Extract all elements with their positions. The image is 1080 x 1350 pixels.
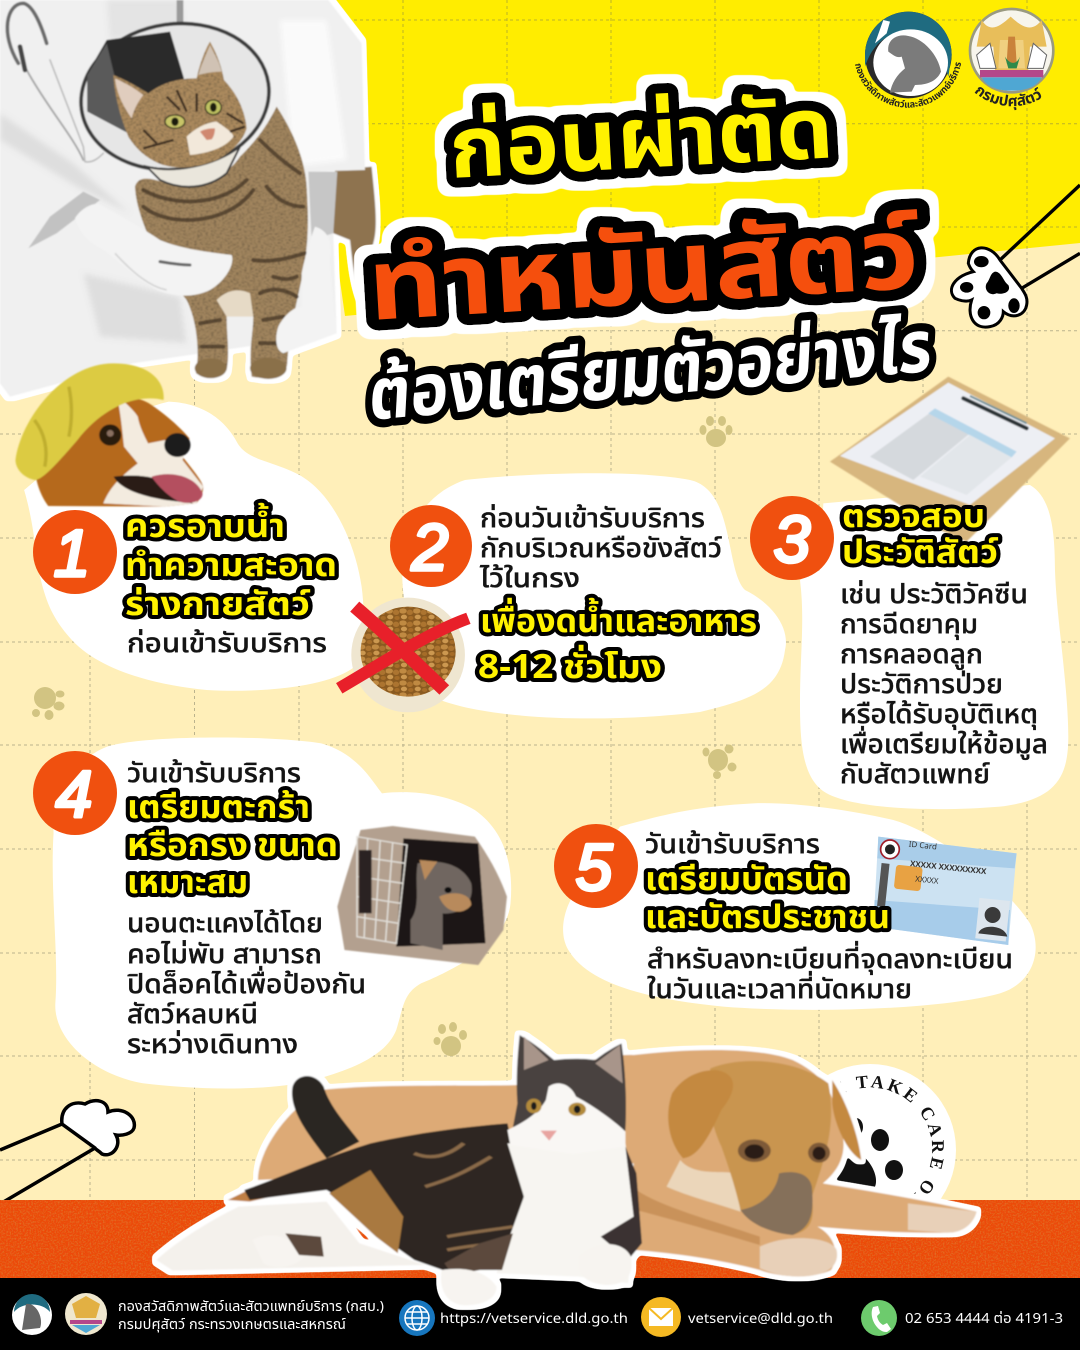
body text: หรือได้รับอุบัติเหตุ [840, 695, 1038, 735]
cat eyes and nose [165, 115, 185, 128]
illustration: Thai national ID card: ID Card [908, 839, 938, 854]
heading [125, 502, 337, 630]
body text: กับสัตวแพทย์ [840, 755, 990, 795]
cat rear leg [333, 167, 376, 300]
dog head [708, 1061, 831, 1235]
cat eyes and nose [526, 1099, 542, 1113]
stethoscope [7, 3, 103, 162]
intro text [479, 499, 722, 599]
decorative outlined cat paw: left [0, 1101, 134, 1204]
cat tail [292, 1076, 359, 1158]
heading [842, 492, 999, 578]
body text: ก่อนเข้ารับบริการ [127, 624, 327, 664]
blob background [800, 485, 1068, 809]
cat paws [195, 358, 287, 379]
card 5: appointment card and ID card [554, 803, 1036, 1010]
heading [478, 597, 757, 693]
footer: organisation logos and name: กรมปศุสัตว์ กระทรวงเกษตรและสหกรณ์ [118, 1315, 346, 1336]
heading: หรือกรง ขนาด [127, 821, 338, 871]
heading: ควรอาบน้ำ [125, 502, 285, 552]
illustration: Thai national ID card [873, 837, 1017, 945]
heading: เพื่องดน้ำและอาหาร [480, 597, 757, 647]
illustration: Thai national ID card: XXXXX XXXXXXXXX [909, 858, 988, 878]
illustration: Thai national ID card: XXXXX [915, 874, 939, 888]
white vet coat [0, 0, 365, 397]
footer: organisation logos and name: กองสวัสดิภาพสัตว์และสัตวแพทย์บริการ (กสบ.) [118, 1297, 384, 1318]
photo: dog lying behind calico cat [156, 1035, 976, 1305]
footer: website: https://vetservice.dld.go.th [440, 1309, 628, 1330]
body text: เพื่อเตรียมให้ข้อมูล [840, 725, 1048, 765]
card 2: withhold food and water [339, 473, 786, 718]
card 1: bathe the animal [15, 363, 364, 691]
number badge 5 [554, 824, 638, 908]
dog body [258, 1050, 976, 1276]
heading: ตรวจสอบ [842, 492, 985, 542]
footer: website [399, 1300, 628, 1336]
body text: การคลอดลูก [840, 635, 983, 675]
heading: และบัตรประชาชน [645, 893, 890, 943]
footer: phone: 02 653 4444 ต่อ 4191-3 [905, 1309, 1063, 1330]
white gloved hands [75, 204, 337, 353]
logo: animal welfare and veterinary service division: กองสวัสดิภาพสัตว์และสัตวแพทย์บริการ [855, 62, 961, 108]
footer: email [641, 1297, 833, 1337]
blob background [563, 803, 1036, 1010]
plastic cone collar [71, 12, 279, 182]
body text: ประวัติการป่วย [840, 665, 1003, 705]
cat head [513, 1035, 626, 1152]
intro text: ก่อนวันเข้ารับบริการ [480, 499, 705, 539]
photo: cat in cone held by veterinarian [0, 0, 376, 397]
cat dark body patches [244, 1123, 524, 1272]
logo: department of livestock development: กรมปศุสัตว์ [974, 87, 1042, 110]
body text: ระหว่างเดินทาง [127, 1025, 298, 1065]
body text [127, 904, 366, 1065]
paw prints decoration [32, 416, 736, 1056]
black footer bar [0, 1278, 1080, 1350]
blob background [24, 402, 364, 691]
blob background [53, 737, 511, 1089]
heading [645, 855, 890, 943]
dog paws [760, 1238, 837, 1277]
footer: organisation logos and name [12, 1293, 384, 1336]
photo: pet carrier with small dog [337, 826, 507, 965]
decorative outlined cat paw: top right [951, 185, 1080, 327]
heading: ทำความสะอาด [125, 541, 337, 591]
tabby cat body [135, 107, 308, 378]
heading: เตรียมบัตรนัด [645, 855, 848, 905]
body text [840, 575, 1048, 795]
intro text: วันเข้ารับบริการ [645, 825, 820, 865]
title: ก่อนผ่าตัด: ก่อนผ่าตัด [446, 66, 837, 217]
number badge 2 [390, 505, 472, 587]
photo: clipboard with form [830, 377, 1070, 542]
body text: ปิดล็อคได้เพื่อป้องกัน [127, 965, 366, 1005]
body text: สัตว์หลบหนี [127, 995, 258, 1035]
blob background [402, 473, 786, 718]
dog chest [667, 1160, 741, 1212]
number badge 2: 2 [411, 510, 448, 584]
body text: นอนตะแคงได้โดย [127, 904, 323, 944]
heading [127, 783, 338, 908]
body text: เช่น ประวัติวัคซีน [840, 575, 1028, 615]
heading: เตรียมตะกร้า [127, 783, 310, 833]
footer: email: vetservice@dld.go.th [688, 1309, 833, 1330]
heading: ร่างกายสัตว์ [125, 580, 311, 630]
dog ear [668, 1070, 733, 1158]
heading: เหมาะสม [127, 858, 248, 908]
number badge 4 [33, 751, 117, 835]
cat front paws [444, 1233, 513, 1275]
intro text: ไว้ในกรง [479, 559, 580, 599]
dog eyes [738, 1139, 771, 1162]
photo: corgi in shower cap [15, 363, 203, 507]
tabby stripes [143, 140, 305, 347]
heading: 8-12 ชั่วโมง [478, 643, 662, 693]
body text: คอไม่พับ สามารถ [127, 935, 322, 975]
body text: สำหรับลงทะเบียนที่จุดลงทะเบียน [647, 940, 1013, 980]
cat white chest [497, 1143, 636, 1283]
body text [647, 940, 1013, 1010]
cat back legs white [156, 1202, 425, 1271]
icon: food bowl crossed out [339, 598, 468, 712]
circular stamp behind the dog: TEAM TAKE CARE OF [840, 1076, 944, 1194]
intro text: วันเข้ารับบริการ [127, 754, 301, 794]
body text: ในวันและเวลาที่นัดหมาย [647, 970, 912, 1010]
number badge 3 [750, 496, 834, 580]
number badge 3: 3 [774, 502, 811, 576]
card 3: medical history [750, 377, 1070, 809]
heading: ประวัติสัตว์ [842, 528, 999, 578]
number badge 4: 4 [56, 757, 92, 831]
card 4: prepare carrier [33, 737, 511, 1089]
logo: animal welfare and veterinary service division [855, 12, 961, 108]
title: ทำหมันสัตว์: ทำหมันสัตว์ [364, 181, 925, 365]
cat head [113, 42, 247, 167]
coat shadows [0, 0, 347, 343]
body text: การฉีดยาคุม [840, 605, 978, 645]
orange floor band [0, 1200, 1080, 1278]
dog muzzle [741, 1172, 813, 1235]
number badge 1 [33, 510, 117, 594]
number badge 5: 5 [576, 830, 613, 904]
logo: department of livestock development [968, 8, 1055, 110]
subtitle: ต้องเตรียมตัวอย่างไร: ต้องเตรียมตัวอย่างไร [366, 293, 935, 453]
footer: phone [861, 1300, 1063, 1336]
number badge 1: 1 [54, 516, 90, 590]
dog front leg shadow [636, 1190, 760, 1245]
circular stamp behind the dog [744, 1064, 956, 1274]
intro text: กักบริเวณหรือขังสัตว์ [480, 529, 722, 569]
